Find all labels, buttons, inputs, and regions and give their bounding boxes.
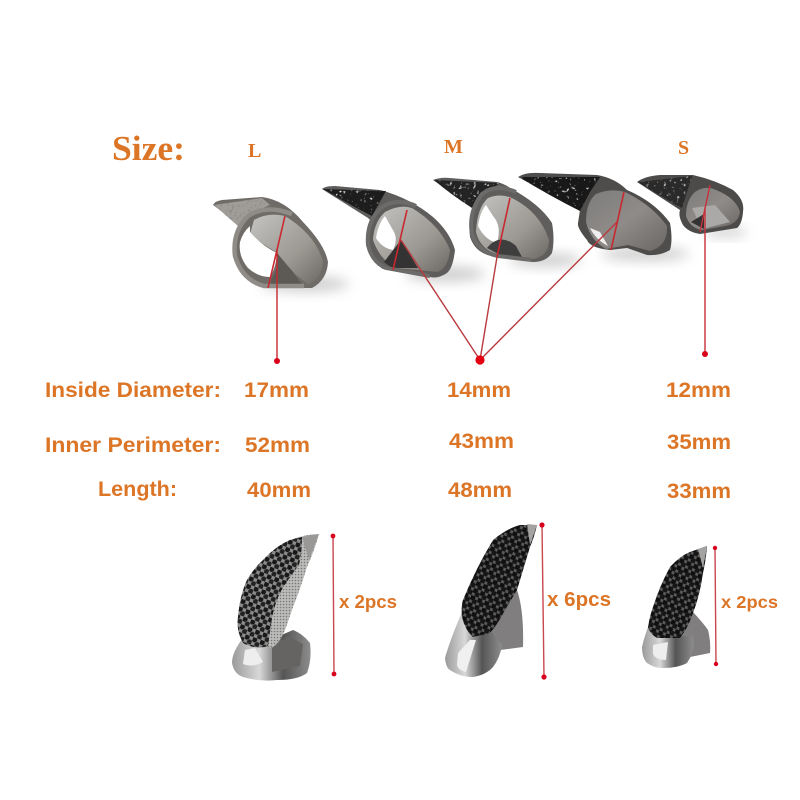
row: length — [98, 477, 731, 503]
row: inner perimeter — [45, 430, 731, 457]
ring photo: large — [213, 197, 328, 288]
ring rim — [471, 188, 532, 260]
ring photo: medium 2 — [433, 178, 554, 262]
size label S: S — [678, 137, 689, 159]
length marker: small — [713, 546, 718, 666]
row: inside diameter: 12mm — [666, 379, 731, 402]
length marker: large — [331, 534, 336, 676]
ring photo: medium 3 — [518, 173, 672, 255]
quantity: medium: x 6pcs — [547, 589, 611, 611]
row: length: 48mm — [448, 479, 512, 502]
row: inner perimeter: 35mm — [667, 431, 731, 454]
row: inner perimeter: 43mm — [449, 430, 514, 453]
row: length: 40mm — [247, 479, 311, 502]
row: inside diameter — [45, 378, 731, 402]
claw photo: large — [232, 534, 319, 681]
size label L: L — [248, 140, 261, 162]
row: inside diameter: 17mm — [244, 379, 309, 402]
length marker: medium — [539, 522, 547, 680]
row: length: 33mm — [667, 480, 731, 503]
size label M: M — [444, 136, 463, 158]
red pointer lines: large — [268, 216, 285, 364]
row: inside diameter: Inside Diameter: — [45, 378, 221, 402]
row: inside diameter: 14mm — [447, 379, 511, 402]
row: inner perimeter: 52mm — [245, 434, 310, 457]
ring rim — [368, 202, 430, 276]
ring photo: small — [637, 175, 743, 234]
title: Size: Size: — [112, 129, 185, 168]
row: inner perimeter: Inner Perimeter: — [45, 433, 221, 457]
claw photo: small — [642, 546, 710, 668]
quantity: small: x 2pcs — [721, 592, 778, 612]
ring rim — [235, 209, 304, 286]
row: length: Length: — [98, 477, 177, 501]
quantity: large: x 2pcs — [339, 592, 397, 612]
ring photo: medium 1 — [322, 186, 455, 278]
red pointer lines: small — [700, 185, 710, 357]
ring shadows — [261, 227, 747, 292]
claw photo: medium — [445, 524, 537, 677]
red pointer lines: medium — [393, 192, 624, 365]
